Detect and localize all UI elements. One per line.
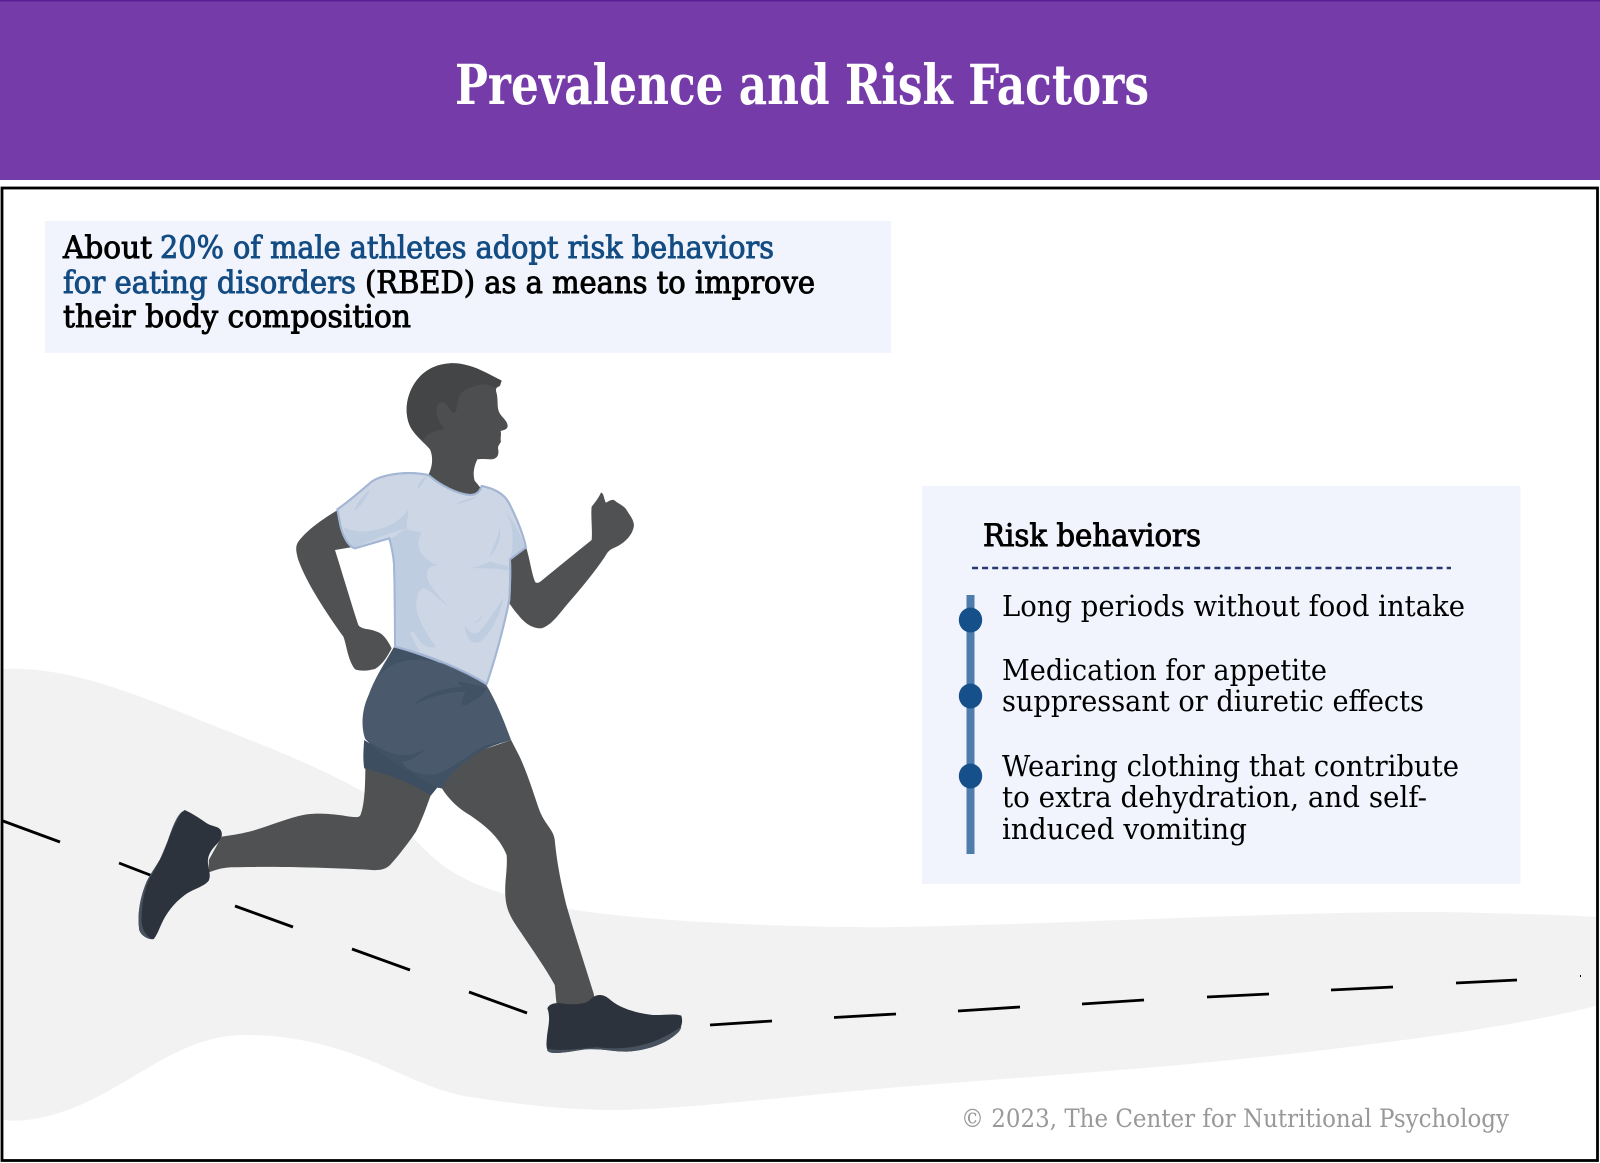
road background <box>4 669 1596 1121</box>
risk behavior list: Wearing clothing that contribute <box>1002 750 1459 783</box>
panel heading: Risk behaviors <box>983 519 1201 554</box>
risk behavior list: Long periods without food intake <box>1002 590 1465 623</box>
risk behaviors panel <box>922 486 1520 884</box>
runner figure <box>139 363 682 1053</box>
title: Prevalence and Risk Factors <box>455 52 1149 117</box>
upper body <box>296 363 634 684</box>
intro text: (RBED) as a means to improve <box>365 266 815 301</box>
timeline <box>959 595 982 854</box>
intro text: their body composition <box>63 300 411 335</box>
header banner <box>0 0 1600 180</box>
intro text: 20% of male athletes adopt risk behaviors <box>160 231 774 266</box>
shorts <box>363 645 511 796</box>
risk behavior list <box>1002 590 1465 846</box>
intro callout <box>45 221 891 353</box>
risk behavior list: to extra dehydration, and self- <box>1002 781 1427 814</box>
intro text <box>62 231 815 335</box>
front leg <box>442 740 595 1005</box>
road dashed centre line <box>3 821 1580 1025</box>
lower body <box>139 645 682 1053</box>
shirt outline <box>337 473 526 684</box>
risk behavior list: suppressant or diuretic effects <box>1002 685 1424 718</box>
risk behavior list: Medication for appetite <box>1002 654 1327 687</box>
shirt shading <box>343 476 525 652</box>
intro text: About <box>62 231 153 266</box>
copyright: © 2023, The Center for Nutritional Psychology <box>961 1104 1510 1134</box>
risk behavior list: induced vomiting <box>1002 813 1247 846</box>
head and neck <box>407 363 508 494</box>
hair <box>407 363 502 441</box>
shirt <box>337 473 526 684</box>
back shoe <box>139 810 222 939</box>
forward arm <box>509 493 634 628</box>
intro text: for eating disorders <box>63 266 356 301</box>
front shoe <box>546 995 682 1053</box>
back leg <box>209 747 438 872</box>
back arm <box>296 509 392 671</box>
